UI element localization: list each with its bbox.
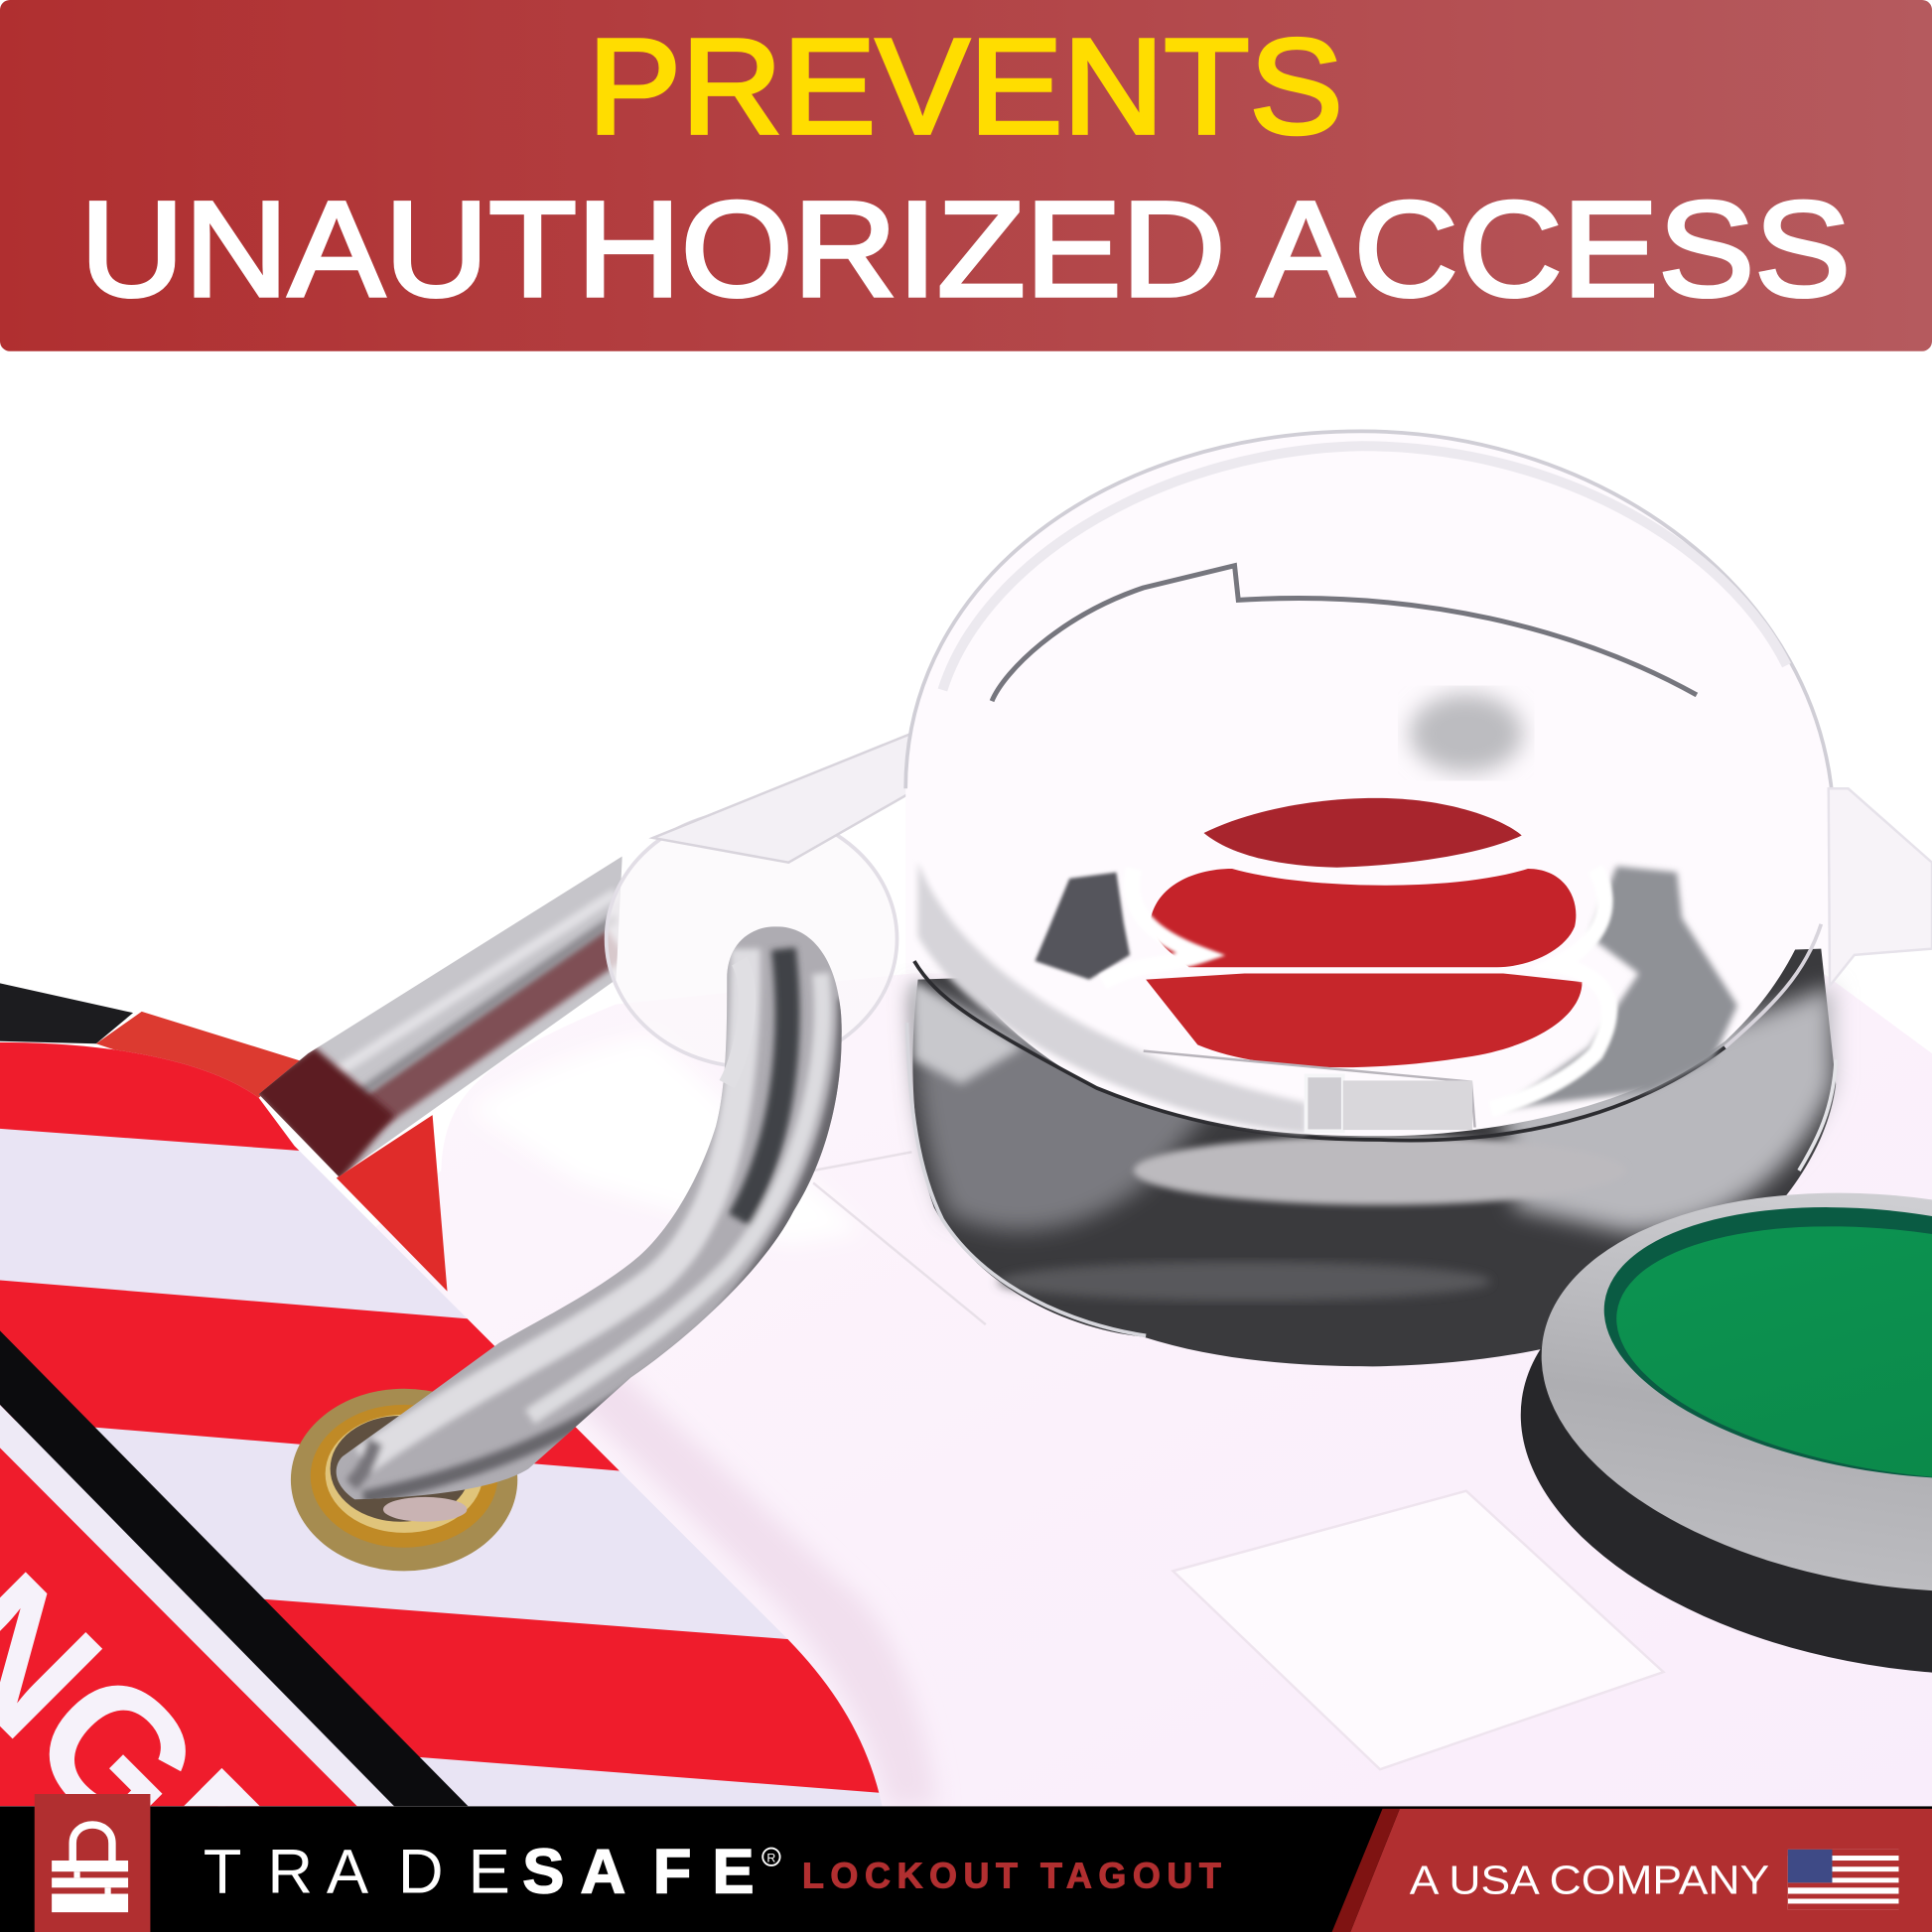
left reflection <box>1035 873 1130 980</box>
dark slanted stripe <box>1332 1809 1400 1932</box>
registered mark: R <box>766 1851 775 1864</box>
cover dome <box>905 431 1836 973</box>
clear button cover <box>905 431 1932 1366</box>
TradeSafe wordmark: TRADE <box>204 1837 510 1906</box>
front tab <box>1144 1051 1475 1131</box>
header banner <box>0 0 1932 351</box>
green push button <box>1492 1149 1932 1723</box>
heading: unauthorized access: UNAUTHORIZED ACCESS <box>80 173 1851 325</box>
front danger tag <box>0 1042 882 1807</box>
lockout tagout label: LOCKOUT TAGOUT <box>802 1855 1221 1895</box>
faint recess in panel <box>1173 1491 1663 1769</box>
usa company label: A USA COMPANY <box>1410 1858 1769 1903</box>
red button middle lobe <box>1151 869 1576 967</box>
control panel surface <box>369 973 1932 1806</box>
red button lower lobe <box>1146 973 1583 1067</box>
registered mark <box>762 1849 780 1865</box>
lower lens grey reflections <box>918 863 1307 1134</box>
photo: button cover and safety tag <box>0 351 1932 1879</box>
black cable <box>0 983 133 1043</box>
tag lettering <box>0 1572 260 1807</box>
shackle upper arm <box>258 856 622 1177</box>
inner ring line <box>992 566 1697 701</box>
rear red tag <box>96 1012 448 1292</box>
shackle lower tube <box>336 926 842 1499</box>
TradeSafe wordmark <box>204 1837 780 1906</box>
cover lens <box>909 801 1830 1136</box>
TradeSafe wordmark: SAFE <box>522 1837 755 1906</box>
lock icon <box>52 1825 128 1912</box>
stainless engraving <box>727 961 748 1084</box>
right reflection <box>1503 866 1737 1109</box>
lock badge <box>35 1794 150 1932</box>
reflection spot <box>1410 694 1523 772</box>
clear loop on cover <box>607 709 993 1067</box>
icon: american flag <box>1788 1850 1898 1910</box>
red button top lobe <box>1204 798 1522 868</box>
footer bar <box>0 1794 1932 1932</box>
brass eyelet <box>291 1389 517 1571</box>
side hinge <box>1829 788 1932 986</box>
glare highlights <box>1103 869 1609 1109</box>
dark base <box>906 949 1836 1366</box>
heading: prevents: PREVENTS <box>588 10 1343 162</box>
red company panel <box>1350 1809 1932 1932</box>
